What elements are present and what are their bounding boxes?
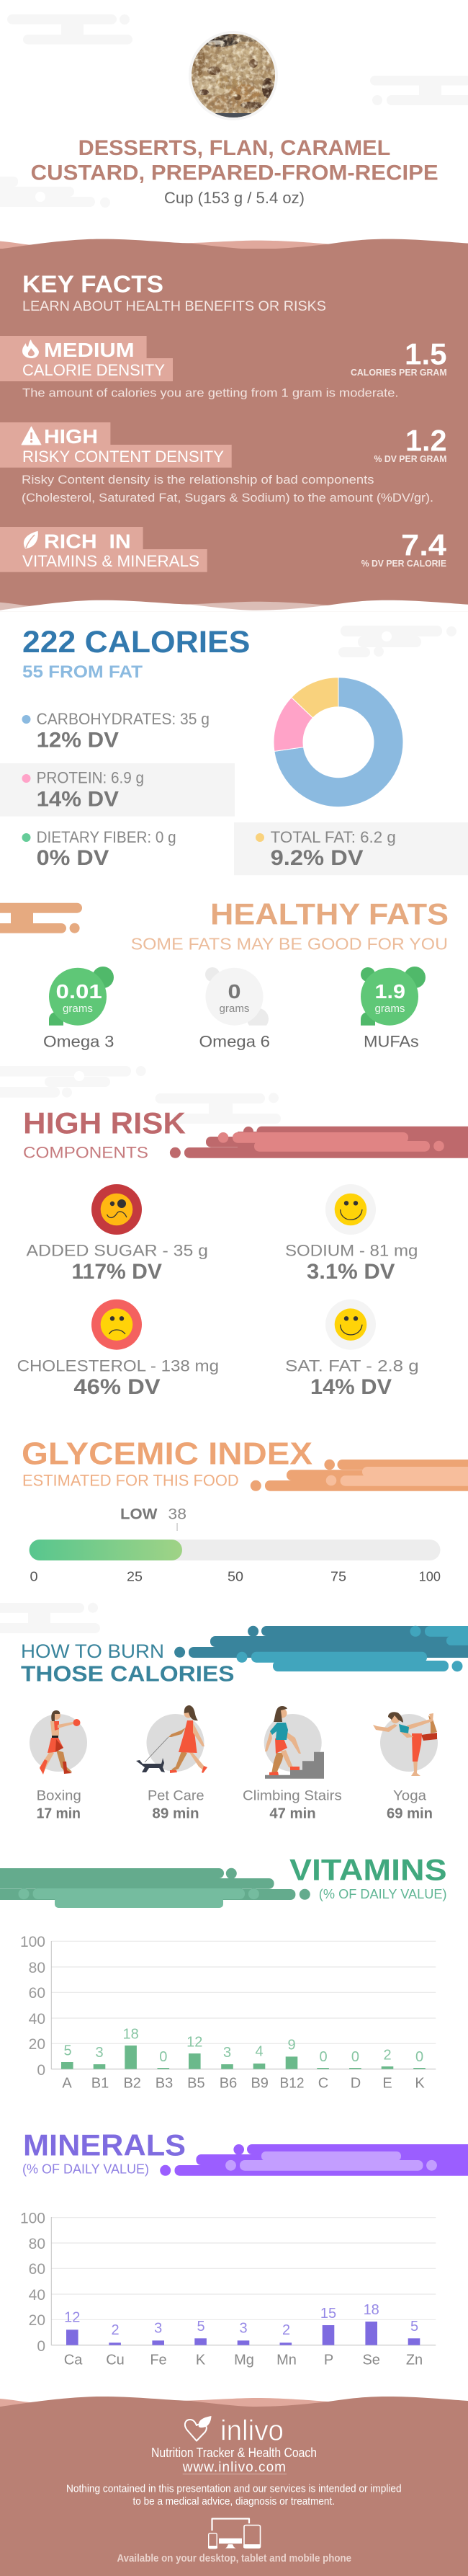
logo mark [185, 2416, 212, 2440]
heading: VITAMINS [289, 1852, 447, 1886]
panel: how to burn [0, 1603, 468, 1822]
bar chart: minerals: P [324, 2353, 333, 2368]
decorative blob [0, 903, 82, 933]
panel: footer [0, 2397, 468, 2576]
activity: pet care [136, 1705, 207, 1822]
heading: MINERALS [23, 2128, 186, 2162]
bar chart: vitamins: 80 [29, 1960, 45, 1976]
bar chart: minerals: 5 [197, 2319, 205, 2335]
gauge axis: 100 [419, 1569, 441, 1584]
fat: MUFAs: grams [374, 1003, 405, 1015]
activity: boxing: 17 min [37, 1806, 81, 1822]
fat: omega 3: grams [63, 1003, 93, 1015]
bar chart: vitamins: B3 [156, 2076, 173, 2092]
icon: flame [22, 339, 39, 358]
risk: cholesterol: CHOLESTEROL - 138 mg [17, 1356, 219, 1374]
activity: climbing stairs: 47 min [269, 1806, 316, 1822]
bar chart: minerals: 2 [111, 2322, 120, 2338]
unit: % DV PER CALORIE [361, 558, 446, 569]
fat: MUFAs: 1.9 [374, 980, 405, 1003]
macro: carbohydrates: CARBOHYDRATES: 35 g [37, 710, 210, 728]
bar chart: vitamins: 3 [223, 2045, 231, 2061]
fat: MUFAs [361, 967, 426, 1050]
bar chart: vitamins: D [351, 2076, 361, 2092]
heading: HOW TO BURN [21, 1640, 164, 1662]
logo wordmark: inlivo [220, 2415, 284, 2447]
description [22, 473, 433, 505]
bar chart: vitamins: B12 [279, 2076, 304, 2092]
bar chart: vitamins: 2 [383, 2047, 392, 2063]
bar chart: minerals: 40 [29, 2287, 45, 2304]
macro: dietary fiber: DIETARY FIBER: 0 g [37, 828, 176, 846]
gauge axis [30, 1569, 441, 1584]
bar chart: vitamins: 60 [29, 1985, 45, 2002]
activity: boxing: Boxing [37, 1789, 81, 1804]
subheading: COMPONENTS [23, 1144, 148, 1162]
bar chart: vitamins: 3 [95, 2045, 104, 2061]
bar chart: minerals: 2 [282, 2322, 290, 2338]
food photo [189, 31, 278, 120]
disclaimer: to be a medical advice, diagnosis or treatment. [132, 2495, 335, 2508]
icon: stairs [265, 1752, 324, 1779]
bar chart: vitamins: B6 [220, 2076, 237, 2092]
macro: total fat: 9.2% DV [271, 846, 364, 870]
value: 1.5 [405, 337, 447, 371]
risk: added sugar: ADDED SUGAR - 35 g [26, 1241, 208, 1259]
bar chart: minerals: Se [362, 2353, 380, 2368]
risk: sodium [285, 1184, 418, 1284]
icon: devices [208, 2518, 261, 2549]
bar chart: minerals: 3 [239, 2321, 248, 2337]
bar chart: vitamins: 40 [29, 2011, 45, 2028]
bottom wave [0, 600, 468, 612]
bar chart: vitamins: E [382, 2076, 392, 2092]
decorative blob [174, 1626, 468, 1671]
decorative blob [0, 1868, 310, 1908]
footer wave [0, 2397, 468, 2408]
icon: woman in yoga pose [373, 1712, 437, 1776]
activity: pet care: Pet Care [148, 1789, 204, 1804]
bar chart: vitamins: 100 [20, 1934, 45, 1950]
fat: omega 3: 0.01 [56, 980, 102, 1003]
heading: HEALTHY FATS [210, 897, 449, 931]
bar chart: vitamins: 0 [159, 2049, 167, 2065]
icon: boxer [40, 1710, 81, 1775]
bar chart: vitamins: 9 [287, 2037, 296, 2053]
heading: KEY FACTS [22, 271, 163, 298]
bar chart: vitamins: 5 [63, 2043, 72, 2059]
fat: omega 3: Omega 3 [43, 1032, 114, 1050]
icon: leaf [24, 531, 38, 548]
bar chart: minerals: K [196, 2353, 206, 2368]
footer background [0, 2407, 468, 2576]
title: CUSTARD, PREPARED-FROM-RECIPE [31, 161, 438, 185]
fat: omega 6 [199, 967, 270, 1050]
icon: woman walking dog [136, 1705, 207, 1773]
decorative clouds [0, 1066, 281, 1124]
fat: omega 6: 0 [228, 980, 240, 1003]
panel: header [0, 14, 468, 208]
macro: protein: PROTEIN: 6.9 g [37, 769, 144, 787]
macro: protein: 14% DV [37, 787, 119, 811]
risk: saturated fat: SAT. FAT - 2.8 g [285, 1356, 419, 1374]
panel: calories [0, 625, 468, 875]
panel: glycemic index [22, 1436, 468, 1584]
bar chart: vitamins: K [415, 2076, 425, 2092]
gauge bar [30, 1540, 441, 1560]
bar chart: minerals: 80 [29, 2236, 45, 2252]
bar chart: vitamins: B2 [123, 2076, 141, 2092]
description: (Cholesterol, Saturated Fat, Sugars & Sodium) to the amount (%DV/gr). [22, 491, 433, 505]
macro: carbohydrates [22, 710, 210, 752]
gauge label [120, 1506, 186, 1531]
gauge label: LOW [120, 1506, 158, 1522]
risk: sodium: SODIUM - 81 mg [285, 1241, 418, 1259]
decorative blob [170, 1127, 468, 1158]
subheading: 55 FROM FAT [22, 662, 143, 682]
bar chart: minerals: 60 [29, 2261, 45, 2278]
heading: HIGH RISK [23, 1106, 186, 1140]
website: www.inlivo.com [182, 2460, 286, 2475]
fact: risky content density [0, 422, 447, 505]
title: DESSERTS, FLAN, CARAMEL [78, 136, 390, 160]
risk: added sugar: 117% DV [72, 1260, 162, 1284]
bar chart: vitamins: A [62, 2076, 72, 2092]
icon: woman climbing [265, 1706, 301, 1775]
decorative blob [160, 2144, 468, 2176]
value: 1.2 [405, 424, 447, 458]
heading strong: THOSE CALORIES [21, 1661, 235, 1687]
macro: protein [0, 763, 235, 817]
activity: yoga: 69 min [387, 1806, 433, 1822]
bar chart: vitamins: 0 [319, 2049, 328, 2065]
activity: yoga [373, 1712, 438, 1822]
title [31, 136, 438, 185]
fat: omega 6: grams [219, 1003, 249, 1015]
bar chart: vitamins: C [318, 2076, 328, 2092]
unit: CALORIES PER GRAM [351, 367, 447, 378]
bar chart: minerals: Mn [276, 2353, 297, 2368]
bar chart: vitamins: 0 [351, 2049, 359, 2065]
fat: omega 6: Omega 6 [199, 1032, 270, 1050]
label: RISKY CONTENT DENSITY [22, 448, 224, 466]
bar chart: minerals: 15 [320, 2306, 336, 2322]
bar chart: minerals: 3 [154, 2321, 162, 2337]
macro: dietary fiber: 0% DV [37, 846, 109, 870]
key facts background [0, 249, 468, 610]
decorative cloud [338, 626, 456, 657]
gauge axis: 75 [330, 1569, 346, 1584]
bar chart: vitamins: 0 [415, 2049, 423, 2065]
bar chart: minerals: 20 [29, 2312, 45, 2329]
heading: 222 CALORIES [22, 625, 250, 659]
subheading: (% OF DAILY VALUE) [22, 2162, 149, 2176]
fat: MUFAs: MUFAs [364, 1032, 419, 1050]
fact: rich in vitamins [0, 527, 447, 572]
activity: climbing stairs: Climbing Stairs [243, 1789, 342, 1804]
serving size: Cup (153 g / 5.4 oz) [164, 189, 305, 207]
subheading: (% OF DAILY VALUE) [319, 1887, 447, 1901]
availability note: Available on your desktop, tablet and mobile phone [117, 2552, 351, 2564]
activity: pet care: 89 min [152, 1806, 199, 1822]
label: VITAMINS & MINERALS [22, 552, 199, 570]
macro: dietary fiber [22, 828, 176, 870]
rating: RICH IN [44, 530, 131, 553]
bar chart: vitamins: B1 [91, 2076, 109, 2092]
bar chart: minerals: Fe [150, 2353, 167, 2368]
activity: climbing stairs [243, 1706, 342, 1822]
bar chart: vitamins: B5 [187, 2076, 205, 2092]
value: 7.4 [401, 528, 447, 562]
decorative cloud right [370, 76, 468, 105]
description: The amount of calories you are getting from 1 gram is moderate. [22, 386, 399, 400]
gauge label: 38 [168, 1506, 186, 1522]
unit: % DV PER GRAM [374, 453, 446, 464]
subheading: LEARN ABOUT HEALTH BENEFITS OR RISKS [22, 299, 326, 314]
bar chart: minerals: 18 [364, 2302, 379, 2318]
bar chart: minerals: Zn [406, 2353, 423, 2368]
rating: MEDIUM [44, 339, 135, 361]
panel: healthy fats [0, 897, 449, 1050]
bar chart: minerals: Ca [64, 2353, 83, 2368]
bar chart: vitamins: 20 [29, 2036, 45, 2053]
panel: minerals [20, 2128, 468, 2368]
bar chart: vitamins: B9 [251, 2076, 269, 2092]
gauge axis: 25 [127, 1569, 143, 1584]
gauge axis: 50 [228, 1569, 243, 1584]
description: Risky Content density is the relationship of bad components [22, 473, 374, 487]
icon: warning [22, 427, 41, 445]
bar chart: minerals: 100 [20, 2210, 45, 2227]
fact: calorie density [0, 336, 447, 400]
macro: total fat [234, 822, 468, 875]
decorative cloud top left [7, 14, 132, 45]
bar chart: minerals [20, 2210, 436, 2368]
disclaimer: Nothing contained in this presentation and our services is intended or implied [66, 2483, 402, 2495]
fat: omega 3 [43, 967, 114, 1050]
bar chart: vitamins: 12 [186, 2034, 202, 2050]
label: CALORIE DENSITY [22, 361, 165, 379]
disclaimer [66, 2483, 402, 2508]
risk: cholesterol: 46% DV [73, 1375, 161, 1399]
bar chart: vitamins: 0 [37, 2062, 45, 2079]
rating: HIGH [44, 425, 98, 448]
bar chart: vitamins: 18 [122, 2026, 139, 2042]
bar chart: minerals: Mg [234, 2353, 254, 2368]
bar chart: minerals: Cu [106, 2353, 125, 2368]
activity: boxing [30, 1710, 87, 1822]
gauge axis: 0 [30, 1569, 38, 1584]
top wave [0, 239, 468, 251]
activity: yoga: Yoga [393, 1789, 426, 1804]
decorative blob [251, 1460, 468, 1491]
bar chart: minerals: 5 [410, 2319, 418, 2335]
decorative cloud left lower [0, 177, 110, 208]
bar chart: minerals: 12 [64, 2310, 80, 2326]
risk: saturated fat [285, 1300, 419, 1399]
risk: sodium: 3.1% DV [307, 1260, 395, 1284]
bar chart: minerals: 0 [37, 2338, 45, 2355]
bar chart: vitamins: 4 [255, 2044, 264, 2060]
decorative cloud [0, 1603, 100, 1633]
tagline: Nutrition Tracker & Health Coach [151, 2445, 317, 2460]
heading: GLYCEMIC INDEX [22, 1436, 312, 1472]
macro: carbohydrates: 12% DV [37, 729, 119, 752]
risk: cholesterol [17, 1300, 219, 1399]
panel: high risk [0, 1066, 468, 1399]
subheading: SOME FATS MAY BE GOOD FOR YOU [131, 934, 448, 953]
subheading: ESTIMATED FOR THIS FOOD [22, 1472, 239, 1490]
risk: added sugar [26, 1184, 208, 1284]
panel: vitamins [0, 1852, 447, 2092]
bar chart: vitamins [20, 1934, 436, 2092]
panel: key facts [0, 239, 468, 612]
donut chart [274, 678, 403, 807]
risk: saturated fat: 14% DV [310, 1375, 392, 1399]
macro: total fat: TOTAL FAT: 6.2 g [271, 828, 396, 846]
